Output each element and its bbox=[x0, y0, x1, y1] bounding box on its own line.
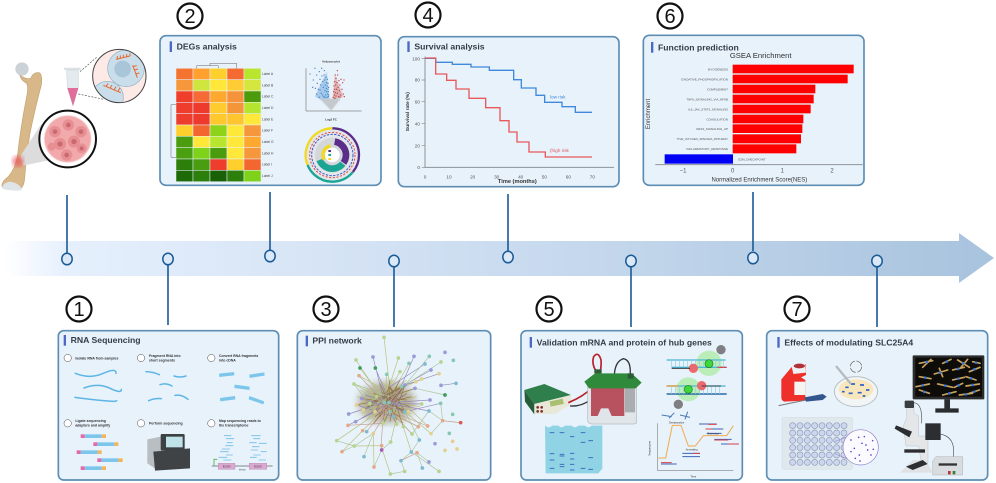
survival chart axes: 20 bbox=[470, 174, 476, 179]
enrichment term labels: OXIDATIVE_PHOSPHORYLATION bbox=[681, 77, 728, 81]
icon: monitor with cell image bbox=[913, 355, 984, 413]
heatmap row labels: Label E bbox=[262, 117, 274, 121]
survival chart axes: 40 bbox=[415, 121, 420, 126]
timeline arrow bbox=[5, 233, 994, 283]
icon: well magnifier bbox=[843, 430, 878, 465]
step number 5 bbox=[536, 296, 562, 322]
heading: Function prediction: Function prediction bbox=[658, 42, 739, 52]
enrichment axes: 1 bbox=[781, 169, 785, 175]
step 3 cDNA bbox=[208, 354, 265, 404]
survival chart axes: 30 bbox=[494, 174, 500, 179]
panel: DEGs analysis bbox=[160, 36, 381, 193]
step number 6: 6 bbox=[664, 6, 676, 28]
survival chart axes: 0 bbox=[417, 165, 420, 170]
icon: control box bbox=[933, 457, 963, 475]
enrichment term labels: INFLAMMATORY_RESPONSE bbox=[686, 147, 728, 151]
icon: tumour site bbox=[12, 156, 24, 167]
step 5 sequencer bbox=[137, 420, 190, 471]
network edges bbox=[337, 337, 461, 474]
enrichment bars bbox=[665, 65, 854, 164]
heading: Effects of modulating SLC25A4: Effects of modulating SLC25A4 bbox=[784, 337, 913, 347]
PCR temperature chart: Extension bbox=[707, 431, 720, 435]
enrichment axes: 0 bbox=[731, 169, 735, 175]
heatmap row labels bbox=[262, 72, 274, 178]
heatmap dendrograms bbox=[171, 63, 237, 157]
step number 6 bbox=[658, 4, 682, 28]
survival chart axes: 40 bbox=[518, 174, 524, 179]
heatmap row labels: Label G bbox=[262, 140, 274, 144]
heatmap row labels: Label B bbox=[262, 83, 274, 87]
enrichment axes: −1 bbox=[680, 169, 687, 175]
PCR temperature chart: Denaturation bbox=[669, 421, 685, 425]
step 6 mapping bbox=[208, 419, 273, 471]
enrichment term labels: TNFA_SIGNALING_VIA_NFKB bbox=[686, 97, 728, 101]
panel: Validation mRNA and protein of hub genes bbox=[521, 331, 742, 480]
survival chart axes: Time (months) bbox=[498, 179, 537, 185]
heatmap row labels: Label I bbox=[262, 163, 272, 167]
survival chart axes: 50 bbox=[542, 174, 547, 179]
step number 2 bbox=[178, 4, 202, 28]
enrichment axes bbox=[646, 99, 863, 184]
step 2 fragment RNA: Fragment RNA into bbox=[149, 354, 181, 358]
step 1 isolate RNA: Isolate RNA from samples bbox=[75, 356, 118, 360]
step 2 fragment RNA: short segments bbox=[149, 359, 175, 363]
step 1 isolate RNA bbox=[64, 354, 121, 401]
step number 3: 3 bbox=[320, 299, 332, 321]
step 3 cDNA: Convert RNA fragments bbox=[219, 354, 258, 358]
icon: power supply bbox=[524, 384, 571, 414]
dashed zoom lines bbox=[78, 57, 104, 99]
survival chart axes: 100 bbox=[412, 56, 420, 61]
step 6 mapping: intron bbox=[239, 467, 246, 471]
enrichment term labels: KRAS_SIGNALING_UP bbox=[696, 127, 728, 131]
high risk curve bbox=[425, 58, 592, 157]
step 5 sequencer: Perform sequencing bbox=[149, 421, 183, 425]
icon: red lead bbox=[568, 354, 601, 403]
heatmap row labels: Label C bbox=[262, 95, 274, 99]
icon: multi-well plate bbox=[782, 417, 853, 469]
step 2 fragment RNA bbox=[137, 354, 188, 401]
step number 4 bbox=[416, 2, 440, 28]
survival chart axes: 60 bbox=[415, 99, 420, 104]
heading: Validation: Validation mRNA and protein of hub genes bbox=[537, 337, 712, 347]
enrichment term labels: TIVE_OXYGEN_SPECIES_PATHWAY bbox=[677, 137, 728, 141]
step 6 mapping: the transcriptome bbox=[219, 424, 248, 428]
step number 7: 7 bbox=[791, 299, 803, 321]
survival chart axes: 70 bbox=[590, 174, 595, 179]
volcano plot: Volcano plot bbox=[322, 60, 340, 64]
step 4 ligate adapters: Ligate sequencing bbox=[75, 419, 106, 423]
icon: cells circle bbox=[92, 48, 146, 104]
heatmap row labels: Label J bbox=[262, 174, 273, 178]
enrichment term labels: G2M_CHECKPOINT bbox=[738, 157, 766, 161]
enrichment term labels: COMPLEMENT bbox=[707, 87, 728, 91]
heading: DEGs analysis: DEGs analysis bbox=[177, 42, 237, 52]
step 4 ligate adapters: adapters and amplify bbox=[75, 424, 110, 428]
icon: gel with bands bbox=[545, 426, 602, 473]
volcano plot: Log2 FC bbox=[325, 118, 338, 122]
timeline connectors and nodes bbox=[62, 192, 882, 327]
step number 7 bbox=[784, 296, 810, 322]
PCR temperature chart bbox=[647, 421, 739, 478]
enrichment axes: 2 bbox=[830, 169, 834, 175]
enrichment term labels bbox=[677, 67, 766, 161]
icon: gel tank bbox=[584, 369, 642, 424]
network nodes bbox=[337, 337, 461, 474]
PCR temperature chart: Time bbox=[690, 474, 697, 478]
survival chart axes bbox=[405, 56, 614, 185]
step number 4: 4 bbox=[422, 5, 434, 27]
survival chart axes: 20 bbox=[415, 143, 420, 148]
icon: electrophoresis wires bbox=[570, 359, 630, 406]
heatmap row labels: Label H bbox=[262, 151, 274, 155]
panel: Function prediction bbox=[643, 35, 864, 185]
label: high risk: (high risk bbox=[550, 148, 570, 153]
illustration: femur, tumour and sample tube bbox=[2, 49, 146, 191]
PCR temperature chart: Temperature bbox=[647, 440, 651, 456]
circular plot bbox=[295, 117, 370, 193]
panel: RNA Sequencing bbox=[58, 331, 279, 480]
step 4 ligate adapters bbox=[64, 419, 123, 470]
survival chart axes: 0 bbox=[424, 174, 427, 179]
enrichment axes: Enrichment bbox=[646, 99, 652, 129]
icon: TaqMan probe schematic bbox=[662, 345, 727, 419]
enrichment term labels: IL6_JAK_STAT3_SIGNALING bbox=[688, 107, 729, 111]
heatmap row labels: Label F bbox=[262, 129, 273, 133]
heading: Survival analysis: Survival analysis bbox=[414, 42, 485, 52]
icon: culture flask bbox=[779, 363, 827, 406]
low risk curve bbox=[425, 58, 592, 112]
panel: Survival analysis bbox=[398, 37, 619, 187]
network dense core shading bbox=[358, 382, 415, 423]
icon: tumour zoom cone bbox=[20, 123, 50, 166]
panel: Effects of modulating SLC25A4 bbox=[767, 331, 988, 480]
step 3 cDNA: into cDNA bbox=[219, 359, 236, 363]
heatmap bbox=[176, 68, 261, 182]
PCR temperature chart: Annealing bbox=[686, 448, 698, 452]
step number 2: 2 bbox=[184, 6, 196, 28]
icon: sample tube bbox=[64, 68, 81, 106]
icon: culture dish with pipette bbox=[834, 361, 878, 407]
volcano plot bbox=[306, 60, 362, 122]
enrichment term labels: COAGULATION bbox=[706, 117, 728, 121]
enrichment term labels: MYOGENESIS bbox=[708, 67, 728, 71]
icon: femur bone bbox=[2, 62, 42, 191]
label: low risk: low risk bbox=[550, 95, 566, 100]
survival chart axes: 10 bbox=[446, 174, 452, 179]
survival chart axes: 60 bbox=[566, 174, 571, 179]
heading: PPI network: PPI network bbox=[312, 336, 362, 346]
heading: RNA Sequencing: RNA Sequencing bbox=[71, 335, 141, 345]
icon: microscope bbox=[895, 401, 963, 475]
step 6 mapping: Exon bbox=[223, 465, 231, 469]
step number 5: 5 bbox=[543, 299, 555, 321]
step 6 mapping: Exon bbox=[254, 465, 262, 469]
panel: PPI network bbox=[297, 331, 491, 480]
chart title: GSEA Enrichment bbox=[730, 51, 792, 60]
step number 1 bbox=[66, 296, 92, 322]
step number 1: 1 bbox=[73, 299, 85, 321]
enrichment axes: Normalized Enrichment Score(NES) bbox=[711, 178, 807, 184]
step 6 mapping: Map sequencing reads to bbox=[219, 419, 261, 423]
icon: tumour cells circle bbox=[39, 111, 96, 167]
survival chart axes: Survival rate (%) bbox=[405, 92, 411, 131]
survival chart axes: 80 bbox=[415, 78, 420, 83]
step number 3 bbox=[314, 296, 338, 322]
heatmap row labels: Label D bbox=[262, 106, 274, 110]
heatmap row labels: Label A bbox=[262, 72, 274, 76]
